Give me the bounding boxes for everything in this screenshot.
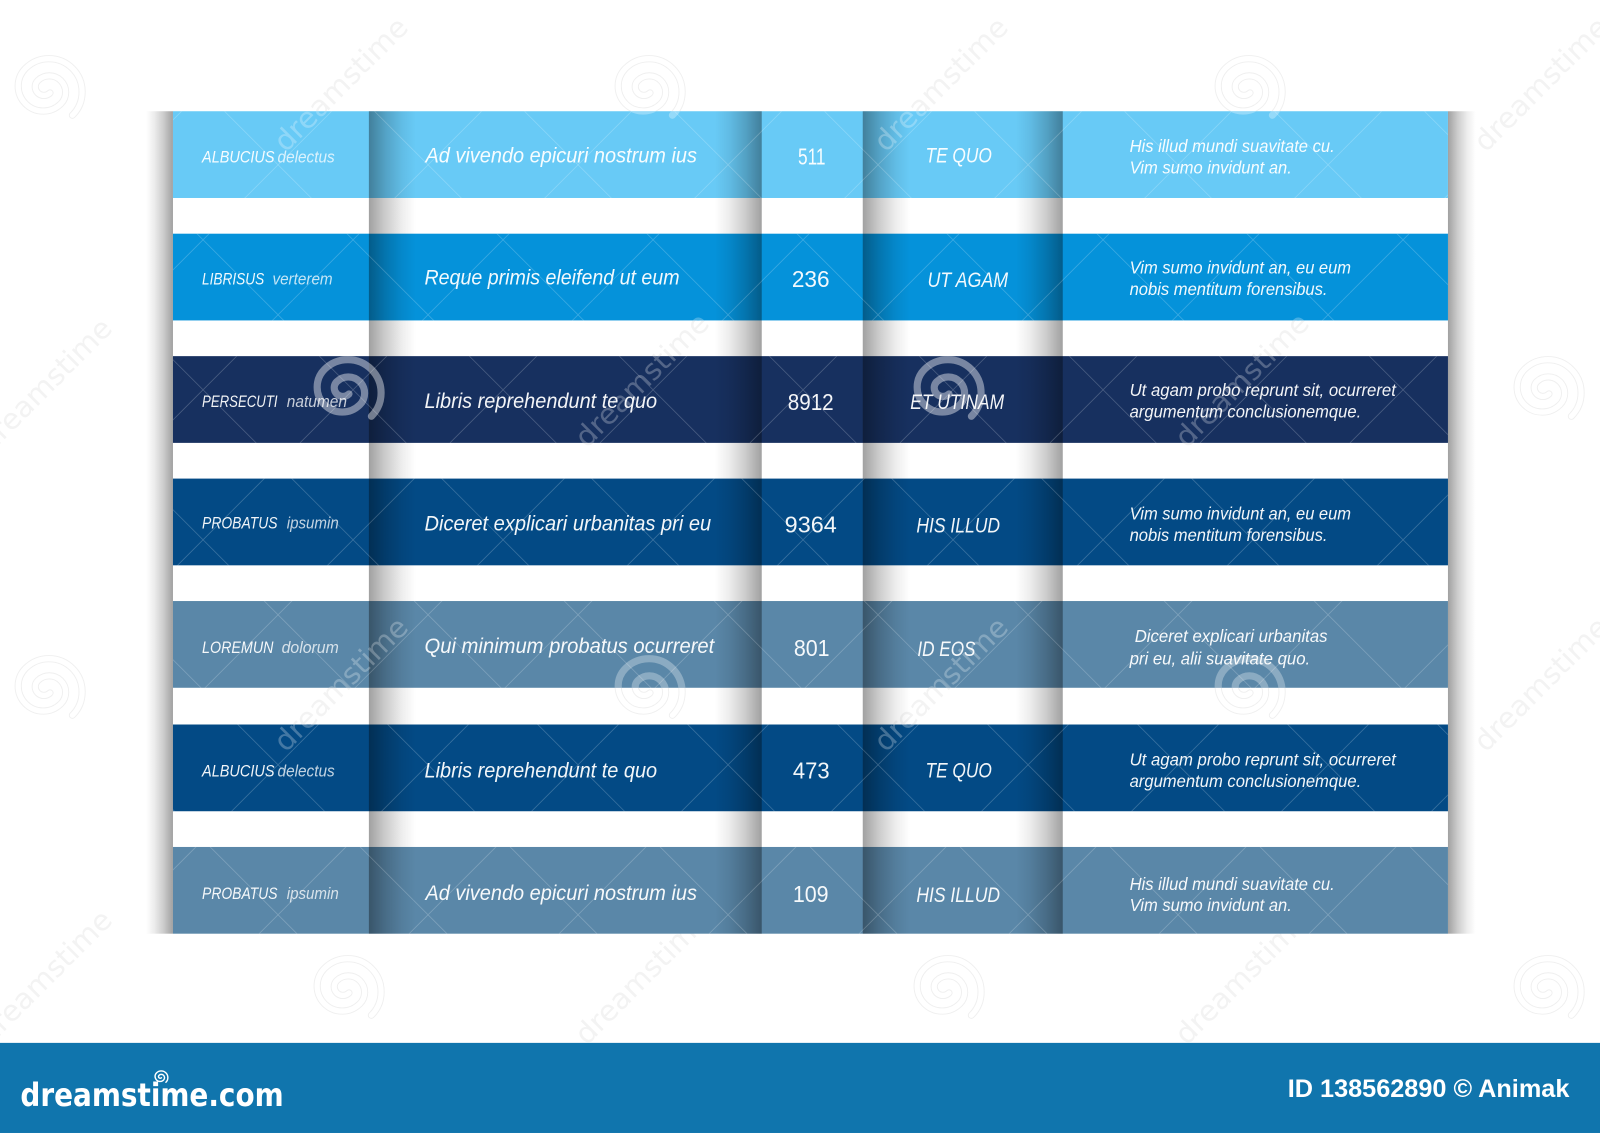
row 5 title: Qui minimum probatus ocurreret: [424, 634, 715, 658]
row 3 description: Ut agam probo reprunt sit, ocurreret: [1130, 380, 1397, 400]
row 4 title: Diceret explicari urbanitas pri eu: [424, 512, 711, 536]
watermark on white: diagonal text: dreamstime: [568, 903, 716, 1051]
footer bar: [0, 1043, 1600, 1133]
row 5 description: pri eu, alii suavitate quo.: [1129, 648, 1310, 668]
band row 1: [173, 111, 1448, 198]
row 2 description: [1130, 257, 1351, 299]
row 4 label: ipsumin: [287, 515, 339, 533]
row 3 description: argumentum conclusionemque.: [1130, 401, 1361, 421]
row 2 title: Reque primis eleifend ut eum: [424, 266, 680, 290]
row 1 label: [201, 147, 335, 166]
row 2 label: verterem: [272, 271, 333, 289]
row 5 text: [202, 626, 1328, 668]
row 1 title: Ad vivendo epicuri nostrum ius: [424, 143, 697, 167]
row 3 label: [202, 392, 347, 411]
row 6 title: Libris reprehendunt te quo: [424, 759, 657, 783]
band row 2: [173, 234, 1448, 320]
row 1 description: Vim sumo invidunt an.: [1130, 157, 1292, 177]
row 6 tag: TE QUO: [926, 759, 992, 783]
icon: logo spiral: [153, 1068, 171, 1086]
watermark on white: diagonal text: dreamstime: [267, 10, 415, 158]
row 7 label: ipsumin: [287, 885, 339, 903]
row 4 label: PROBATUS: [202, 514, 278, 533]
watermark on white: diagonal text: dreamstime: [1168, 306, 1316, 454]
watermark on white: diagonal text: dreamstime: [1168, 903, 1316, 1051]
row 1 description: [1130, 136, 1335, 177]
row 3 description: [1130, 380, 1397, 421]
row 2 label: LIBRISUS: [202, 270, 265, 289]
row 6 label: [201, 762, 335, 781]
band row 7: [173, 847, 1448, 934]
column fold shadows: [369, 111, 1063, 934]
row 3 label: natumen: [287, 393, 347, 411]
band row 5: [173, 601, 1448, 688]
footer credit: ID 138562890 © Animak: [1288, 1075, 1569, 1103]
band row 3: [173, 356, 1448, 443]
band row 6: [173, 725, 1448, 811]
outer shadow: left: [146, 111, 173, 934]
row 6 description: [1130, 749, 1397, 791]
row 6 text: [201, 749, 1397, 791]
watermark lattice lines on bands: [173, 111, 1448, 934]
row 4 tag: HIS ILLUD: [916, 514, 1000, 538]
row 4 description: Vim sumo invidunt an, eu eum: [1130, 503, 1351, 523]
row 1 description: His illud mundi suavitate cu.: [1130, 136, 1335, 156]
row 3 text: [202, 380, 1397, 421]
watermark on white: diagonal text: dreamstime: [867, 610, 1015, 758]
row 1 label: delectus: [278, 148, 335, 166]
row 3 tag: ET UTINAM: [910, 390, 1004, 414]
row 5 description: Diceret explicari urbanitas: [1135, 626, 1328, 646]
footer logo: dreamstime.com: [20, 1078, 284, 1114]
row 5 label: LOREMUN: [202, 638, 274, 657]
row 5 label: [202, 638, 339, 657]
outer shadow: right: [1448, 111, 1476, 934]
row 3 number: 8912: [788, 389, 834, 415]
row 6 label: ALBUCIUS: [201, 762, 275, 781]
row 7 label: PROBATUS: [202, 884, 278, 903]
row 2 number: 236: [792, 266, 830, 292]
row 6 number: 473: [793, 758, 830, 784]
row 7 text: [202, 874, 1335, 915]
row 1 number: 511: [798, 143, 826, 169]
row 2 label: [202, 270, 333, 289]
row 4 description: nobis mentitum forensibus.: [1130, 525, 1328, 545]
row 4 number: 9364: [785, 512, 837, 538]
row 4 description: [1130, 503, 1351, 545]
row 2 text: [202, 257, 1351, 299]
watermark on white: diagonal text: dreamstime: [568, 306, 716, 454]
row 3 label: PERSECUTI: [202, 392, 278, 411]
row 4 text: [202, 503, 1351, 545]
row 1 label: ALBUCIUS: [201, 147, 275, 166]
row 6 label: delectus: [278, 763, 335, 781]
row 7 description: His illud mundi suavitate cu.: [1130, 874, 1335, 894]
row 1 tag: TE QUO: [926, 143, 992, 167]
row 6 description: argumentum conclusionemque.: [1130, 771, 1361, 791]
row 7 title: Ad vivendo epicuri nostrum ius: [424, 881, 697, 905]
row 2 description: nobis mentitum forensibus.: [1130, 279, 1328, 299]
row 7 label: [202, 884, 339, 903]
row 3 title: Libris reprehendunt te quo: [424, 389, 657, 413]
row 6 description: Ut agam probo reprunt sit, ocurreret: [1130, 749, 1397, 769]
row 7 number: 109: [793, 881, 829, 907]
watermark on white: diagonal text: dreamstime: [267, 610, 415, 758]
row 1 text: [201, 136, 1335, 177]
row 2 tag: UT AGAM: [928, 268, 1008, 292]
row 7 description: Vim sumo invidunt an.: [1130, 895, 1292, 915]
row 4 label: [202, 514, 339, 533]
row 7 tag: HIS ILLUD: [916, 883, 1000, 907]
table bands: [173, 111, 1448, 934]
row 2 description: Vim sumo invidunt an, eu eum: [1130, 257, 1351, 277]
row 5 number: 801: [794, 635, 830, 661]
row 5 tag: ID EOS: [917, 637, 976, 661]
row 7 description: [1130, 874, 1335, 915]
row 5 label: dolorum: [282, 639, 339, 657]
band row 4: [173, 479, 1448, 565]
watermark on bands: [278, 112, 1304, 750]
row 5 description: [1129, 626, 1328, 668]
watermark on white: diagonal text: dreamstime: [867, 10, 1015, 158]
